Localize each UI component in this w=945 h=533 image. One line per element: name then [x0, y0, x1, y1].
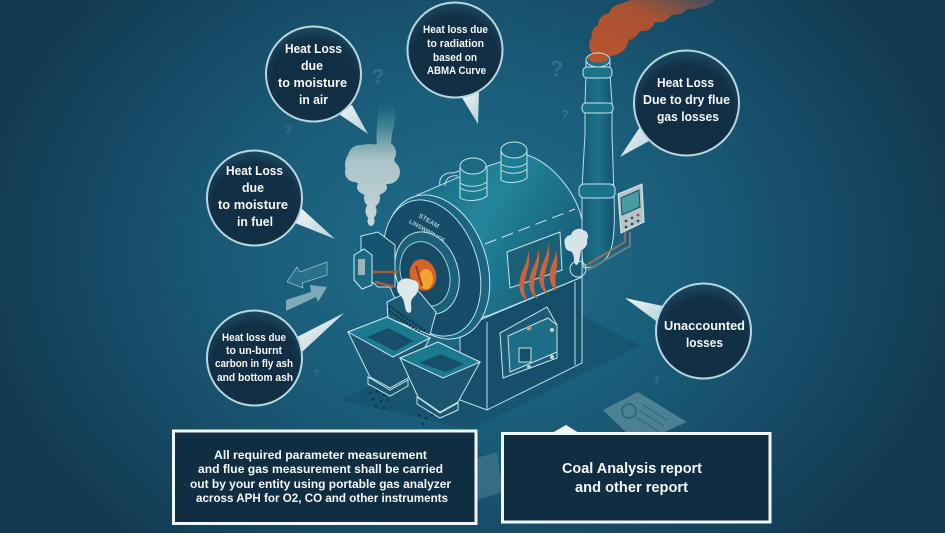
callout: un-burnt carbon: carbon in fly ash — [215, 358, 293, 370]
callout: moisture in air: Heat Loss — [285, 41, 342, 56]
smoke: grey steam plume — [345, 103, 400, 226]
callout: moisture in fuel: to moisture — [218, 197, 288, 212]
callout: unaccounted losses — [625, 284, 751, 378]
grill panel — [507, 232, 562, 288]
hopper right — [400, 342, 480, 418]
callout: radiation: ABMA Curve — [427, 65, 486, 77]
faint question marks: ? — [550, 56, 563, 81]
floor shadow — [340, 305, 640, 430]
white paper corner above right box — [552, 425, 579, 433]
panel: measurement note: and flue gas measurement shall be carried — [198, 462, 443, 476]
callout: dry flue gas — [620, 50, 739, 157]
callout: moisture in air: due — [301, 58, 323, 73]
boiler: LINSWRPUCE — [408, 219, 445, 245]
faint question marks: ? — [653, 375, 660, 387]
faint question marks — [284, 56, 660, 387]
hopper left — [348, 317, 430, 396]
panel: measurement note: All required parameter measurement — [214, 448, 427, 462]
gauge panel — [618, 184, 644, 233]
callout: un-burnt carbon: Heat loss due — [222, 332, 286, 344]
panel: coal analysis report: Coal Analysis report — [562, 461, 702, 477]
panel: coal analysis report — [502, 434, 770, 522]
panel: measurement note: across APH for O2, CO and other instruments — [196, 491, 448, 505]
callout: unaccounted losses: losses — [686, 335, 723, 350]
pipes: gauge connection — [585, 232, 630, 270]
callout: radiation: to radiation — [427, 38, 484, 50]
panel: measurement note — [174, 431, 476, 524]
red flue smoke — [589, 0, 715, 56]
stack mouth — [586, 53, 610, 67]
panel: coal analysis report: and other report — [575, 480, 688, 496]
callout: dry flue gas: Due to dry flue — [643, 92, 730, 107]
ash dots — [369, 390, 433, 425]
callout: un-burnt carbon — [207, 310, 344, 406]
dashed seam — [485, 209, 575, 244]
faint question marks: ? — [284, 122, 292, 137]
callout: radiation: Heat loss due — [423, 24, 488, 36]
paper: sheet behind left box — [477, 452, 503, 500]
base block — [460, 277, 582, 410]
flames: heat loss — [519, 243, 557, 301]
callout: moisture in air — [266, 26, 368, 134]
faint question marks: ? — [372, 66, 384, 88]
faint question marks: ? — [561, 107, 569, 122]
arrows: left pair — [286, 262, 327, 311]
callout: dry flue gas: gas losses — [657, 109, 719, 124]
callout: radiation — [408, 2, 502, 124]
shell — [417, 155, 582, 330]
steam at fire door — [397, 278, 419, 313]
paper: report sheet on floor — [603, 392, 687, 434]
steam at elbow — [564, 229, 588, 265]
chimney — [579, 0, 715, 268]
callout: dry flue gas: Heat Loss — [657, 75, 714, 90]
chute — [387, 288, 436, 335]
callout: moisture in fuel: Heat Loss — [226, 163, 283, 178]
stack collars — [583, 67, 612, 78]
callout: radiation: based on — [433, 52, 477, 64]
callout: un-burnt carbon: and bottom ash — [217, 372, 293, 384]
callout: unaccounted losses: Unaccounted — [664, 318, 745, 333]
stack body — [582, 62, 614, 268]
flame: furnace — [406, 256, 440, 294]
callout: moisture in fuel — [207, 150, 335, 246]
access door — [500, 307, 557, 378]
callout: moisture in air: in air — [299, 92, 328, 107]
boiler — [348, 142, 588, 418]
faint question marks: ? — [313, 368, 320, 380]
burner box — [354, 232, 398, 289]
disc lettering: STEAM — [417, 213, 440, 230]
front disc — [367, 181, 507, 353]
fire door ring — [385, 223, 469, 323]
panel: measurement note: out by your entity using portable gas analyzer — [190, 477, 451, 491]
callout: un-burnt carbon: to un-burnt — [226, 345, 282, 357]
callout: moisture in fuel: due — [242, 180, 264, 195]
domes — [440, 142, 527, 200]
callout: moisture in fuel: in fuel — [237, 214, 273, 229]
callout: moisture in air: to moisture — [278, 75, 347, 90]
